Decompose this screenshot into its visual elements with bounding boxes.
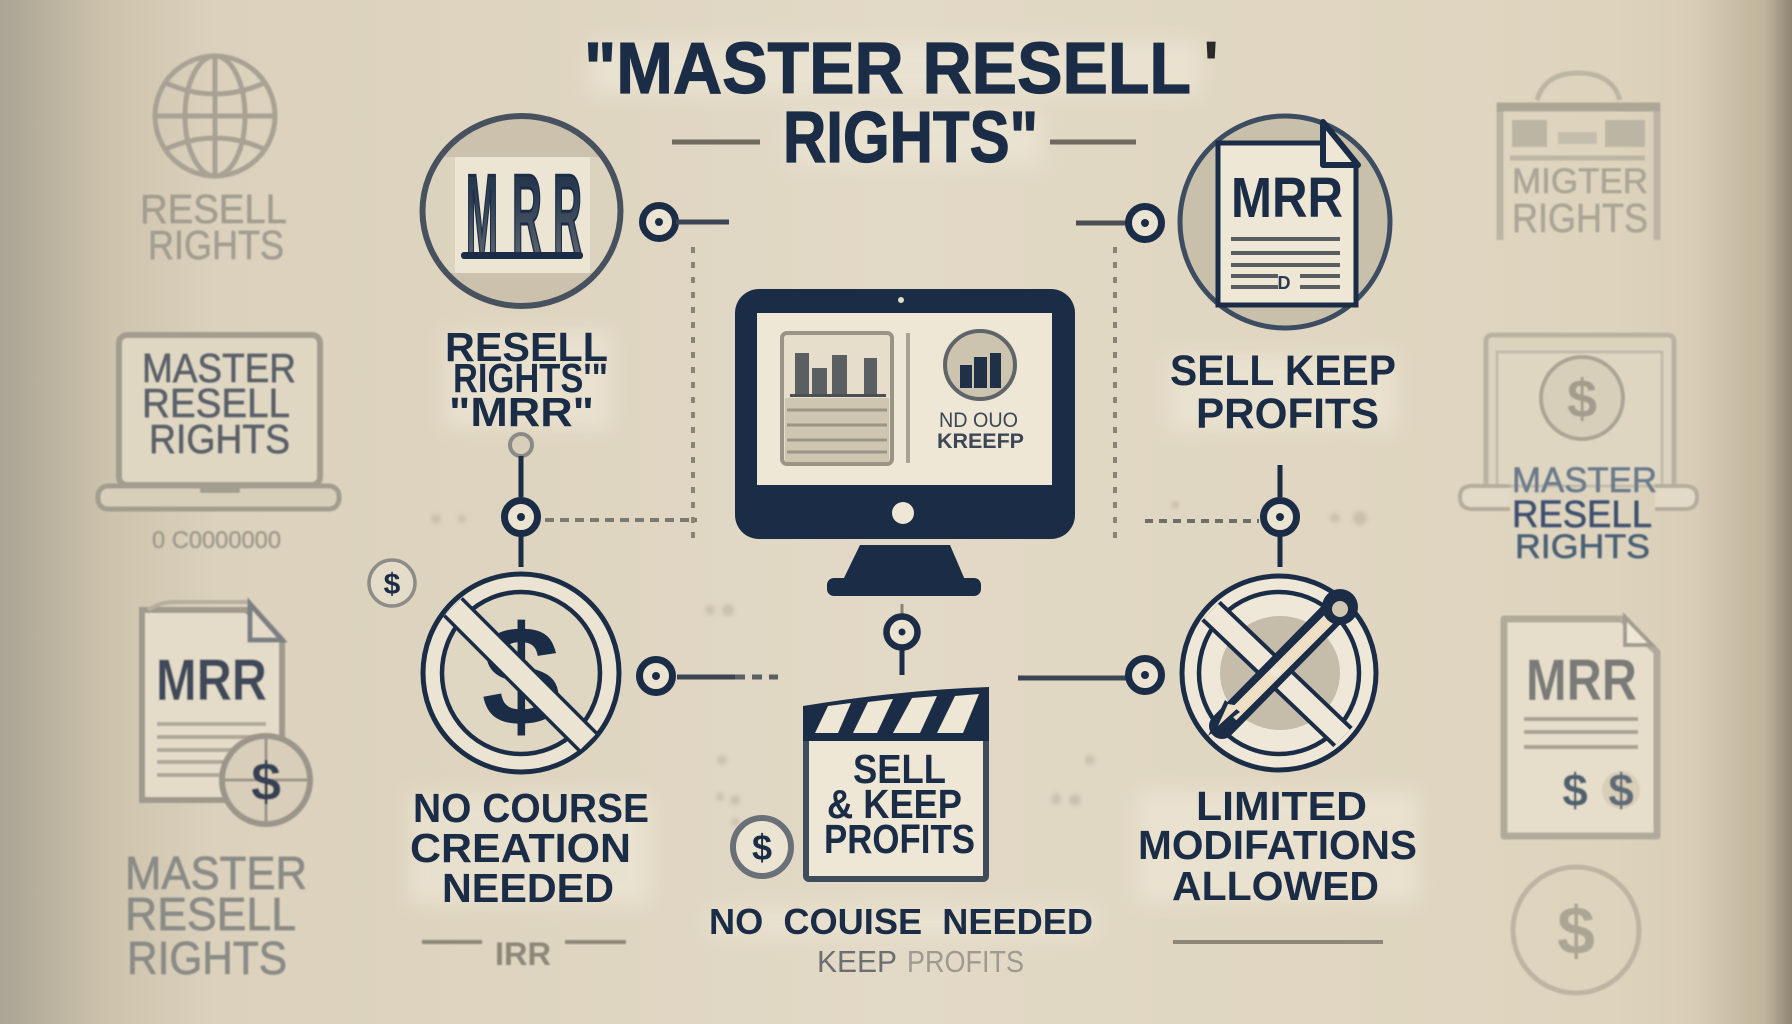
title: RIGHTS" <box>783 98 1038 178</box>
label: resell rights: RESELL <box>140 186 287 232</box>
label: resell rights: RIGHTS <box>148 222 284 268</box>
icon: small chart circle <box>945 331 1015 399</box>
icon: MRR circle: R <box>553 152 582 279</box>
label: master resell rights <box>125 847 307 984</box>
label: resell rights mrr: RIGHTS'" <box>453 355 608 401</box>
icon: dollar coin: $ <box>251 752 281 812</box>
icon: document in circle: MRR <box>1231 166 1343 230</box>
label: no course creation needed: CREATION <box>410 825 631 871</box>
icon: dollar coin by clapper: $ <box>752 827 772 868</box>
icon: MRR circle <box>420 115 624 309</box>
label: limited modifications allowed <box>1138 783 1417 909</box>
dots row: 0 C0000000 <box>152 527 281 554</box>
connector: left middle node <box>504 434 697 567</box>
panel: MRR document circle <box>1170 116 1396 438</box>
label: master resell rights: RIGHTS <box>1515 528 1650 566</box>
panel: right laptop <box>1460 335 1697 566</box>
label: keep profits <box>817 944 1024 979</box>
label: keep profits: KEEP <box>817 944 897 979</box>
screen label <box>937 409 1024 453</box>
icon: document: MRR <box>156 648 267 713</box>
panel: top right storefront <box>1497 73 1660 241</box>
icon: crossed pencil <box>1182 576 1376 770</box>
label: limited modifications allowed: ALLOWED <box>1172 863 1379 909</box>
icon: document: $ <box>1562 764 1588 816</box>
icon: dollar coin <box>222 736 310 824</box>
title: ' <box>1203 27 1219 103</box>
panel: no course creation <box>410 574 649 972</box>
icon: globe <box>155 56 275 176</box>
icon: document <box>1504 617 1657 836</box>
title <box>584 27 1219 178</box>
icon: clapperboard <box>803 687 989 879</box>
label: no course creation needed <box>410 785 649 911</box>
icon: laptop with coin: $ <box>1567 369 1597 429</box>
label: master resell rights: RESELL <box>125 888 296 940</box>
panel: right document <box>1504 617 1657 836</box>
label: master resell rights: MASTER <box>142 345 296 391</box>
label: sell keep profits <box>1170 347 1396 438</box>
label: migter rights <box>1512 162 1648 241</box>
icon: document in circle: D <box>1278 273 1290 293</box>
label: master resell rights: MASTER <box>125 847 307 899</box>
connector: right middle node <box>1145 465 1296 567</box>
panel: MRR circle <box>420 115 624 435</box>
icon: crossed dollar <box>423 574 619 772</box>
panel: left laptop <box>98 335 339 554</box>
label: resell rights mrr: RESELL <box>445 324 608 370</box>
panel: limited modifications <box>1138 576 1417 944</box>
icon: MRR circle: R <box>512 152 542 279</box>
label: resell rights mrr: "MRR" <box>449 389 594 435</box>
label: resell rights mrr <box>445 324 608 435</box>
label: sell and keep profits: PROFITS <box>824 816 975 862</box>
icon: storefront <box>1497 73 1660 240</box>
label: sell and keep profits: SELL <box>853 746 946 792</box>
label: limited modifications allowed: MODIFATIONS <box>1138 822 1417 868</box>
chart panel <box>782 333 892 464</box>
label: keep profits: PROFITS <box>907 944 1024 979</box>
icon: MRR circle: M <box>466 152 498 279</box>
dotted line: right vertical <box>1113 247 1117 542</box>
faint smudges <box>431 501 1367 826</box>
icon: crossed dollar: $ <box>482 597 560 756</box>
screen label: ND OUO <box>939 409 1018 432</box>
label: limited modifications allowed: LIMITED <box>1196 783 1367 829</box>
icon: small dollar coin <box>369 560 415 606</box>
icon: document <box>142 602 282 800</box>
label: master resell rights <box>1512 461 1657 566</box>
icon: bottom right coin: $ <box>1557 893 1595 969</box>
divider line <box>1173 940 1383 944</box>
label: no course creation needed: NEEDED <box>442 865 614 911</box>
label: master resell rights: RIGHTS <box>149 416 290 462</box>
label: master resell rights: RESELL <box>1512 494 1652 536</box>
label: migter rights: MIGTER <box>1512 162 1648 201</box>
connector: top right node <box>1076 206 1162 240</box>
label: sell and keep profits: & KEEP <box>827 781 962 827</box>
divider <box>906 333 910 463</box>
icon: document in circle <box>1180 116 1390 328</box>
connector: bottom left node <box>640 660 778 692</box>
icon: bottom right coin <box>1513 867 1639 993</box>
label: resell rights <box>140 186 287 268</box>
connector: top left node <box>642 206 729 238</box>
label: sell keep profits: SELL KEEP <box>1170 347 1396 395</box>
label: master resell rights: RIGHTS <box>127 932 287 984</box>
screen label: KREEFP <box>937 430 1024 453</box>
label: master resell rights: MASTER <box>1512 461 1657 500</box>
panel: left document <box>125 602 310 984</box>
monitor body <box>735 289 1075 596</box>
icon: small dollar coin: $ <box>384 568 401 601</box>
icon: document: MRR <box>1526 648 1637 713</box>
label: sell keep profits: PROFITS <box>1196 390 1379 438</box>
label: migter rights: RIGHTS <box>1512 195 1648 241</box>
label: sell and keep profits <box>824 746 975 862</box>
label: master resell rights: RESELL <box>142 380 290 426</box>
caption: faded mrr: IRR <box>495 936 551 972</box>
icon: document: $ <box>1608 764 1634 816</box>
panel: clapper <box>803 687 989 879</box>
icon: dollar coin by clapper <box>733 818 791 876</box>
soft glows behind labels <box>410 42 1418 935</box>
connector: bottom right node <box>1018 658 1162 692</box>
panel: central monitor <box>735 289 1075 596</box>
title: "MASTER RESELL <box>584 29 1191 109</box>
caption: faded mrr <box>422 936 626 972</box>
connector: monitor to clapper <box>886 604 918 675</box>
icon: laptop with coin <box>1460 335 1697 509</box>
label: no course needed: NO COUISE NEEDED <box>709 901 1093 942</box>
label: master resell rights <box>142 345 296 462</box>
panel: globe resell rights <box>140 56 287 268</box>
dotted line: left vertical <box>691 247 695 540</box>
label: no course creation needed: NO COURSE <box>413 785 649 831</box>
icon: laptop <box>98 335 339 509</box>
